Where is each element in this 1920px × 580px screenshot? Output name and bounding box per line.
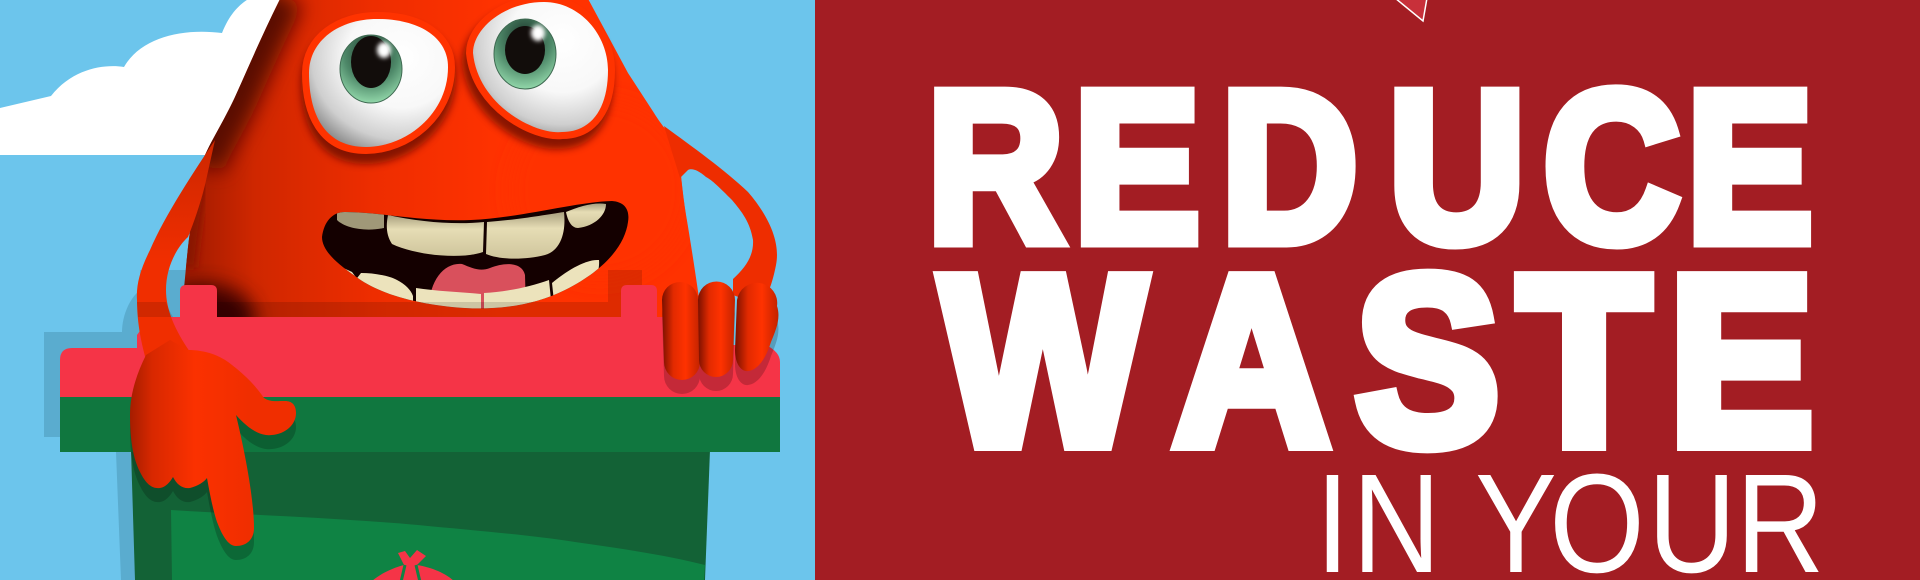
right eye [473, 2, 608, 132]
left eye [309, 19, 448, 147]
bin body [131, 450, 710, 580]
lid shadow on monster [180, 270, 642, 317]
icon: rubbish bag [371, 550, 455, 580]
wheelie bin [60, 270, 780, 580]
monster left hand pointing [130, 340, 296, 546]
monster right hand on bin [662, 282, 778, 380]
headline: REDUCE: REDUCE [927, 47, 1813, 287]
red background panel [815, 0, 1920, 580]
lower teeth [344, 260, 600, 308]
cloud [0, 0, 330, 155]
left eye socket [309, 19, 448, 156]
green lid band [60, 397, 780, 452]
bin front panel [171, 510, 705, 580]
mouth [322, 201, 628, 320]
tongue [429, 264, 526, 312]
upper teeth [337, 203, 606, 259]
left arm [137, 140, 215, 360]
red lid [60, 285, 780, 397]
monster body [184, 0, 698, 317]
hand shadows [130, 296, 778, 560]
arrow tip [1395, 0, 1427, 21]
headline: WASTE: WASTE [941, 226, 1813, 495]
right eye socket [470, 2, 608, 141]
monster character [184, 0, 777, 317]
illustration panel: sky [0, 0, 815, 580]
right arm [664, 126, 777, 305]
bin shadow on sky [44, 270, 186, 580]
